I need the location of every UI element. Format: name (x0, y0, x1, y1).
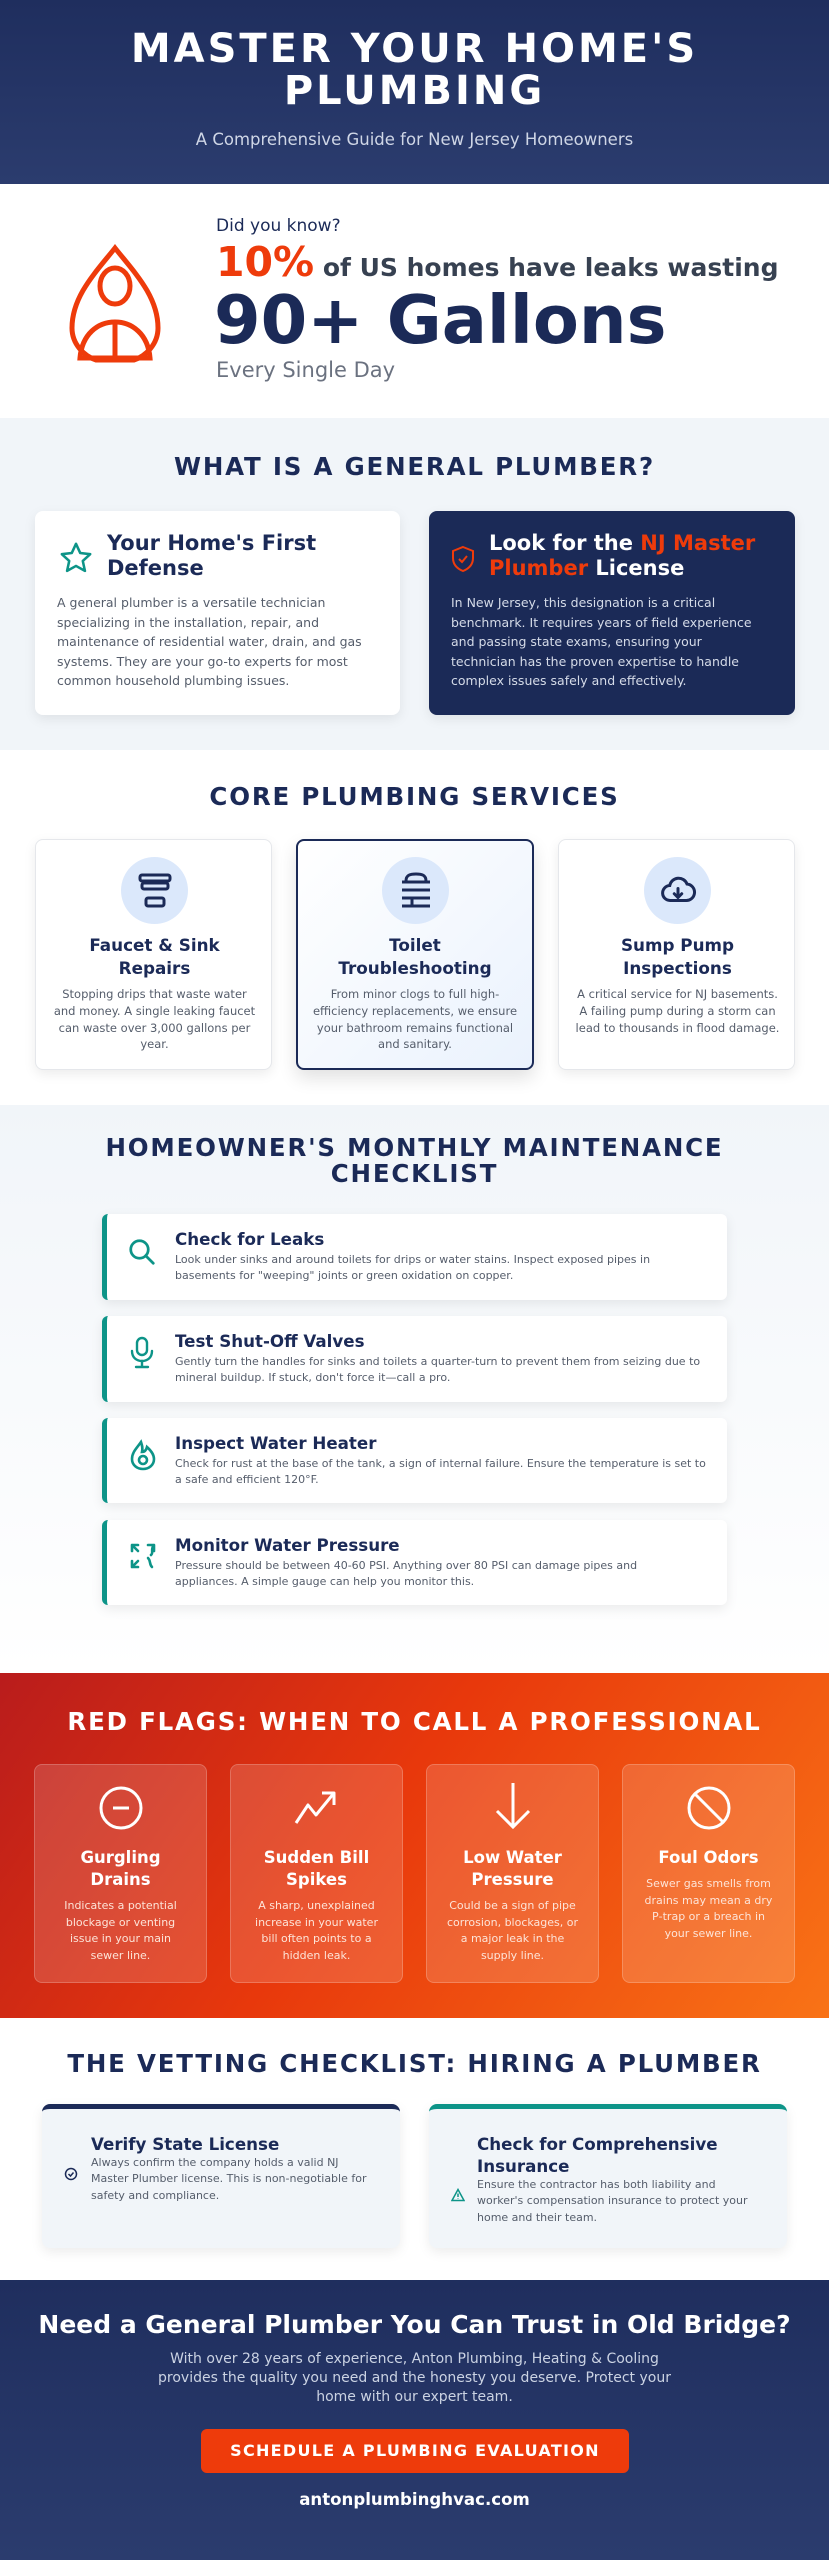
card body: In New Jersey, this designation is a critical benchmark. It requires years of field experience and passing state exams, ensuring your technician has the proven expertise to handle complex issues safely and effectively. (451, 595, 752, 688)
card: low water pressure (426, 1764, 599, 1983)
section: maintenance checklist (0, 1105, 829, 1673)
description: Could be a sign of pipe corrosion, blockages, or a major leak in the supply line. (447, 1899, 578, 1962)
text: Check for Leaks (175, 1229, 324, 1249)
description: Sewer gas smells from drains may mean a dry P‑trap or a breach in your sewer line. (645, 1877, 772, 1940)
section: core services (0, 750, 829, 1105)
icon: shield (452, 546, 474, 572)
icon: arrows (130, 1544, 156, 1568)
icon: check circle (64, 2168, 78, 2180)
big number: 90+ Gallons (214, 281, 666, 359)
stat section (0, 184, 829, 418)
text (175, 1229, 650, 1282)
card title (489, 531, 756, 580)
text: Test Shut-Off Valves (175, 1331, 365, 1351)
icon: prohibited (688, 1786, 730, 1830)
text: Check for rust at the base of the tank, a sign of internal failure. Ensure the temperature is set to a safe and efficient 120°F. (175, 1457, 706, 1486)
card title: Plumber License (489, 556, 684, 580)
card: toilet (highlighted) (296, 839, 534, 1070)
title (463, 1848, 562, 1889)
section: vetting checklist (0, 2018, 829, 2280)
card title: Look for the NJ Master (489, 531, 755, 555)
icon: water drop person (70, 244, 160, 362)
icon: cloud download (644, 857, 711, 924)
title: Sump Pump (621, 935, 734, 955)
title: Pressure (471, 1870, 554, 1889)
text (91, 2134, 366, 2202)
title: MASTER YOUR HOME'S (131, 26, 698, 72)
description: From minor clogs to full high-efficiency replacements, we ensure your bathroom remains functional and sanitary. (313, 987, 517, 1051)
card: sump pump (558, 839, 795, 1070)
icon: trending up (294, 1792, 336, 1824)
footer call to action (0, 2280, 829, 2560)
card: insurance (429, 2104, 787, 2248)
title: Drains (90, 1870, 151, 1889)
title: Toilet (389, 935, 441, 955)
card: first defense (35, 511, 400, 715)
header banner (0, 0, 829, 184)
text: Pressure should be between 40-60 PSI. Anything over 80 PSI can damage pipes and appliances. A simple gauge can help you monitor this. (175, 1559, 637, 1588)
description: A critical service for NJ basements. A failing pump during a storm can lead to thousands in flood damage. (576, 987, 779, 1035)
text: Look under sinks and around toilets for drips or water stains. Inspect exposed pipes in basements for "weeping" joints or green oxidation on copper. (175, 1253, 650, 1282)
did you know: Did you know? (216, 216, 341, 236)
icon: down arrow (496, 1783, 530, 1829)
title: Spikes (286, 1870, 347, 1889)
text: Always confirm the company holds a valid NJ Master Plumber license. This is non-negotiable for safety and compliance. (91, 2156, 366, 2202)
heading (106, 1133, 723, 1188)
text: Gently turn the handles for sinks and toilets a quarter-turn to prevent them from seizing due to mineral buildup. If stuck, don't force it—call a pro. (175, 1355, 700, 1384)
section: what is a general plumber (0, 418, 829, 750)
item: shut-off valves (102, 1316, 727, 1402)
title (131, 26, 698, 114)
card: faucet (35, 839, 272, 1070)
title (338, 935, 492, 978)
text (477, 2134, 748, 2224)
section: red flags (0, 1673, 829, 2018)
button (201, 2429, 629, 2473)
icon: magnifier (129, 1239, 155, 1265)
heading: HOMEOWNER'S MONTHLY MAINTENANCE (106, 1133, 723, 1162)
footer title: Need a General Plumber You Can Trust in Old Bridge? (38, 2310, 791, 2339)
icon: star (60, 542, 92, 572)
title: Sudden Bill (264, 1848, 369, 1867)
every single day: Every Single Day (216, 358, 395, 382)
description: A sharp, unexplained increase in your water bill often points to a hidden leak. (255, 1899, 378, 1962)
text: Inspect Water Heater (175, 1433, 376, 1453)
item: check for leaks (102, 1214, 727, 1300)
card: bill spikes (230, 1764, 403, 1983)
heading: CORE PLUMBING SERVICES (209, 782, 620, 811)
description: Indicates a potential blockage or venting issue in your main sewer line. (64, 1899, 177, 1962)
stat line: 10% of US homes have leaks wasting (216, 238, 778, 286)
title: Faucet & Sink (89, 935, 220, 955)
card title: Your Home's First (107, 531, 316, 555)
button: SCHEDULE A PLUMBING EVALUATION (230, 2441, 600, 2460)
heading: CHECKLIST (331, 1159, 498, 1188)
title (264, 1848, 369, 1889)
card: foul odors (622, 1764, 795, 1983)
title: Foul Odors (658, 1848, 759, 1867)
text: Monitor Water Pressure (175, 1535, 400, 1555)
title: Inspections (623, 958, 732, 978)
website url: antonplumbinghvac.com (299, 2490, 530, 2509)
icon: faucet (121, 857, 188, 924)
heading: RED FLAGS: WHEN TO CALL A PROFESSIONAL (67, 1707, 762, 1736)
icon: valve (130, 1336, 154, 1368)
icon: toilet (382, 857, 449, 924)
item: water pressure (102, 1520, 727, 1605)
title: Gurgling (80, 1848, 161, 1867)
text: Check for Comprehensive Insurance (477, 2134, 718, 2176)
title (89, 935, 220, 978)
heading: WHAT IS A GENERAL PLUMBER? (174, 452, 655, 481)
text (175, 1331, 700, 1384)
title (621, 935, 734, 978)
card: NJ master license (429, 511, 795, 715)
item: water heater (102, 1418, 727, 1503)
icon: minus circle (100, 1786, 142, 1830)
text (175, 1535, 637, 1588)
card title: Defense (107, 556, 204, 580)
icon: warning (451, 2188, 465, 2202)
title: PLUMBING (284, 68, 545, 114)
footer paragraph: With over 28 years of experience, Anton Plumbing, Heating & Cooling provides the quality you need and the honesty you deserve. Protect your home with our expert team. (158, 2351, 671, 2405)
heading: THE VETTING CHECKLIST: HIRING A PLUMBER (67, 2049, 762, 2078)
card title (106, 531, 316, 580)
title: Low Water (463, 1848, 562, 1867)
card: gurgling drains (34, 1764, 207, 1983)
text (175, 1433, 706, 1486)
title (80, 1848, 161, 1889)
subtitle: A Comprehensive Guide for New Jersey Homeowners (196, 130, 633, 149)
title: Repairs (119, 958, 190, 978)
icon: flame (130, 1439, 156, 1470)
card: verify license (42, 2104, 400, 2248)
title: Troubleshooting (338, 958, 492, 978)
card body: A general plumber is a versatile technician specializing in the installation, repair, and maintenance of residential water, drain, and gas systems. They are your go-to experts for most common household plumbing issues. (57, 595, 362, 688)
text: Ensure the contractor has both liability and worker's compensation insurance to protect your home and their team. (477, 2178, 748, 2224)
text: Verify State License (91, 2134, 279, 2154)
description: Stopping drips that waste water and money. A single leaking faucet can waste over 3,000 gallons per year. (54, 987, 255, 1051)
